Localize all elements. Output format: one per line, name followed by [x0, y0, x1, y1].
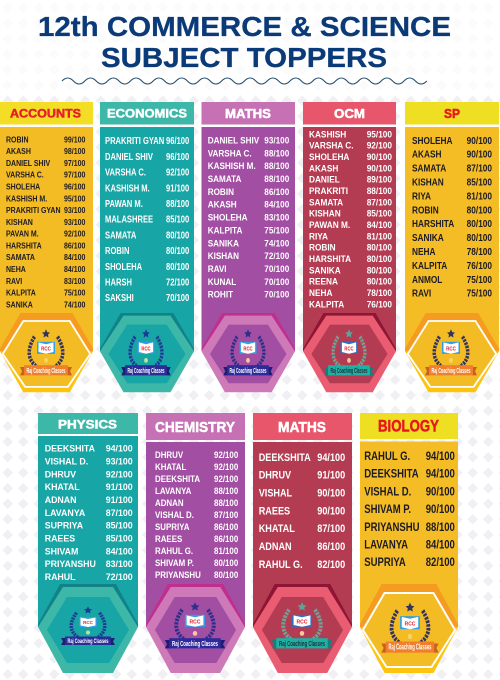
chemistry list: 80/100: [214, 570, 239, 580]
economics list: 80/100: [166, 229, 189, 241]
maths list: 70/100: [264, 276, 289, 287]
chemistry list: [155, 450, 239, 580]
physics list: 92/100: [106, 469, 133, 479]
panel: physics: [38, 413, 138, 673]
economics list: 80/100: [166, 261, 189, 272]
chemistry list: 86/100: [214, 522, 239, 532]
ocm list: SANIKA: [309, 265, 341, 275]
maths list: 94/100: [317, 452, 346, 464]
logo: Raj Coaching Classes: Raj Coaching Classes: [26, 367, 66, 375]
economics list: 72/100: [166, 276, 189, 288]
ocm list: REENA: [309, 276, 338, 287]
accounts list: NEHA: [6, 264, 26, 274]
economics list: SAKSHI: [105, 292, 134, 303]
logo: Raj Coaching Classes: [272, 602, 332, 648]
accounts list: 99/100: [64, 135, 86, 144]
accounts header: ACCOUNTS: [10, 106, 81, 120]
physics list: PRIYANSHU: [45, 559, 96, 569]
ocm list: PAWAN M.: [309, 220, 350, 230]
panel: accounts: [0, 102, 93, 392]
maths list: ADNAN: [259, 541, 292, 553]
ocm list: RIYA: [309, 231, 328, 241]
biology list: DEEKSHITA: [364, 468, 419, 481]
sp list: 90/100: [467, 149, 492, 160]
sp list: SANIKA: [412, 232, 444, 243]
maths list: AKASH: [208, 199, 237, 210]
maths list: 83/100: [264, 212, 289, 223]
physics list: SHIVAM: [45, 546, 79, 556]
ocm list: SAMATA: [309, 197, 343, 207]
panel: maths (science): [253, 413, 352, 673]
logo: Raj Coaching Classes: Raj Coaching Classes: [389, 642, 431, 652]
maths list: 86/100: [264, 186, 289, 197]
maths header: MATHS: [278, 420, 326, 436]
physics badge: [38, 584, 138, 673]
chemistry list: 92/100: [214, 450, 239, 460]
biology list: 84/100: [426, 539, 455, 552]
ocm list: KISHAN: [309, 208, 341, 219]
title: SUBJECT TOPPERS: [101, 42, 387, 73]
accounts list: 93/100: [64, 205, 86, 215]
chemistry list: 80/100: [214, 558, 239, 568]
panel: economics: [100, 102, 194, 392]
maths list: 87/100: [317, 523, 346, 535]
chemistry list: VISHAL D.: [155, 510, 194, 520]
economics list: 96/100: [166, 135, 189, 146]
physics list: 84/100: [106, 546, 133, 556]
sp header: SP: [444, 107, 460, 121]
economics list: 70/100: [166, 292, 189, 303]
sp list: 87/100: [467, 163, 492, 174]
maths list: DHRUV: [259, 470, 291, 482]
accounts list: KASHISH M.: [6, 194, 47, 203]
ocm list: 89/100: [367, 174, 392, 185]
ocm list: DANIEL: [309, 174, 340, 185]
maths list: KISHAN: [208, 251, 239, 261]
accounts list: 93/100: [64, 217, 86, 227]
ocm list: 78/100: [367, 288, 392, 298]
accounts list: HARSHITA: [6, 241, 42, 251]
logo: Raj Coaching Classes: [223, 329, 273, 375]
chemistry list: DHRUV: [155, 450, 184, 460]
maths list: 93/100: [264, 135, 289, 146]
ocm list: 84/100: [367, 220, 392, 230]
physics list: LAVANYA: [45, 508, 86, 518]
logo: Raj Coaching Classes: RCC: [344, 346, 354, 353]
panel: ocm: [303, 102, 396, 392]
maths list: ROBIN: [208, 186, 234, 197]
sp list: 90/100: [467, 135, 492, 146]
panel: biology: [360, 413, 458, 673]
panel: maths (commerce): [202, 102, 295, 392]
sp list: NEHA: [412, 246, 436, 257]
economics list: 85/100: [166, 214, 189, 225]
maths list: VISHAL: [259, 488, 292, 500]
ocm list: HARSHITA: [309, 254, 351, 264]
biology list: 94/100: [426, 450, 455, 463]
biology list: 88/100: [426, 521, 455, 534]
chemistry list: 86/100: [214, 534, 239, 544]
biology list: SHIVAM P.: [364, 503, 411, 516]
maths badge: [202, 313, 295, 392]
sp list: 75/100: [467, 274, 492, 285]
sp list: AKASH: [412, 149, 441, 160]
sp list: HARSHITA: [412, 218, 455, 229]
logo: Raj Coaching Classes: RCC: [243, 346, 253, 353]
accounts list: VARSHA C.: [6, 170, 44, 180]
maths list: 70/100: [264, 263, 289, 274]
chemistry list: 88/100: [214, 486, 239, 496]
chemistry list: 88/100: [214, 498, 239, 508]
ocm list: 90/100: [367, 152, 392, 162]
sp list: 75/100: [467, 288, 492, 299]
logo: Raj Coaching Classes: RCC: [141, 346, 151, 353]
accounts list: [6, 135, 86, 310]
physics list: [45, 443, 133, 582]
logo: Raj Coaching Classes: RCC: [41, 346, 51, 353]
accounts list: DANIEL SHIV: [6, 158, 51, 168]
accounts list: 83/100: [64, 276, 86, 286]
ocm list: NEHA: [309, 288, 332, 298]
economics list: SHOLEHA: [105, 261, 143, 272]
maths list: DANIEL SHIV: [208, 135, 259, 146]
biology list: SUPRIYA: [364, 556, 406, 569]
maths list: ROHIT: [208, 289, 234, 300]
maths list: 90/100: [317, 488, 346, 500]
maths list: 75/100: [264, 225, 289, 236]
physics list: 83/100: [106, 559, 133, 569]
logo: Raj Coaching Classes: RCC: [446, 346, 456, 353]
maths list: 91/100: [317, 470, 346, 482]
sp list: 78/100: [467, 246, 492, 257]
biology list: 90/100: [426, 503, 455, 516]
physics header: PHYSICS: [58, 420, 117, 432]
accounts list: 84/100: [64, 264, 86, 274]
logo: Raj Coaching Classes: [165, 602, 225, 648]
maths list: RAVI: [208, 263, 227, 274]
accounts header: [0, 102, 93, 124]
sp list: 81/100: [467, 191, 492, 202]
maths list: SANIKA: [208, 238, 240, 248]
maths list: 72/100: [264, 251, 289, 261]
biology list: 90/100: [426, 486, 455, 499]
sp list: 80/100: [467, 205, 492, 215]
logo: Raj Coaching Classes: [381, 603, 439, 653]
ocm badge: [303, 313, 396, 392]
chemistry list: PRIYANSHU: [155, 570, 201, 580]
ocm list: PRAKRITI: [309, 186, 348, 196]
maths list: 88/100: [264, 148, 289, 158]
physics list: 72/100: [106, 572, 133, 582]
ocm list: 95/100: [367, 129, 392, 139]
maths list: KASHISH M.: [208, 161, 256, 171]
maths list: 70/100: [264, 289, 289, 300]
sp list: 80/100: [467, 218, 492, 229]
sp list: ROBIN: [412, 205, 439, 215]
biology list: LAVANYA: [364, 539, 408, 552]
chemistry list: RAEES: [155, 534, 183, 544]
accounts list: 92/100: [64, 229, 86, 239]
accounts list: SANIKA: [6, 300, 33, 310]
chemistry list: SHIVAM P.: [155, 558, 194, 568]
panel: chemistry: [146, 413, 245, 673]
physics list: 85/100: [106, 520, 133, 531]
ocm list: 87/100: [367, 197, 392, 207]
chemistry list: 92/100: [214, 462, 239, 472]
chemistry list: 92/100: [214, 474, 239, 484]
accounts list: 84/100: [64, 253, 86, 262]
economics list: DANIEL SHIV: [105, 151, 153, 162]
maths list: KALPITA: [208, 225, 243, 236]
accounts list: 96/100: [64, 182, 86, 192]
economics list: 88/100: [166, 198, 189, 209]
sp list: RAVI: [412, 288, 431, 299]
logo: Raj Coaching Classes: Raj Coaching Classes: [68, 639, 109, 645]
sp header: [405, 102, 499, 124]
maths list: [208, 135, 289, 300]
physics list: 93/100: [106, 456, 133, 466]
logo: Raj Coaching Classes: Raj Coaching Classes: [229, 367, 267, 375]
economics list: PAWAN M.: [105, 198, 143, 209]
ocm header: OCM: [334, 107, 365, 121]
sp list: KALPITA: [412, 260, 448, 271]
accounts list: ROBIN: [6, 135, 29, 144]
sp list: 80/100: [467, 232, 492, 243]
sp list: 76/100: [467, 260, 492, 271]
logo: Raj Coaching Classes: RCC: [190, 619, 201, 626]
economics list: VARSHA C.: [105, 167, 146, 178]
maths list: KHATAL: [259, 523, 295, 535]
physics list: DHRUV: [45, 469, 77, 479]
ocm list: KASHISH: [309, 129, 346, 139]
physics list: RAEES: [45, 533, 75, 544]
maths list: 88/100: [264, 173, 289, 184]
accounts list: AKASH: [6, 146, 31, 156]
ocm header: [303, 102, 396, 124]
sp list: ANMOL: [412, 274, 443, 285]
maths list: SAMATA: [208, 173, 242, 184]
chemistry header: CHEMISTRY: [155, 419, 235, 436]
physics list: DEEKSHITA: [45, 443, 95, 454]
chemistry list: DEEKSHITA: [155, 474, 200, 484]
ocm list: 80/100: [367, 265, 392, 275]
accounts list: SAMATA: [6, 253, 35, 262]
accounts list: KALPITA: [6, 288, 36, 298]
logo: Raj Coaching Classes: [121, 329, 171, 375]
biology list: 94/100: [426, 468, 455, 481]
ocm list: 80/100: [367, 242, 392, 253]
ocm list: 90/100: [367, 163, 392, 173]
biology list: 82/100: [426, 556, 455, 569]
logo: Raj Coaching Classes: RCC: [297, 619, 308, 626]
chemistry list: RAHUL G.: [155, 546, 193, 556]
biology header: [360, 413, 458, 439]
ocm list: VARSHA C.: [309, 140, 354, 151]
logo: Raj Coaching Classes: [20, 329, 72, 375]
ocm list: ROBIN: [309, 242, 336, 253]
maths list: RAEES: [259, 506, 290, 518]
ocm list: 80/100: [367, 276, 392, 287]
chemistry list: ADNAN: [155, 498, 184, 508]
ocm list: 76/100: [367, 299, 392, 309]
maths header: [202, 102, 295, 124]
physics list: VISHAL D.: [45, 456, 88, 466]
maths list: 90/100: [317, 506, 346, 518]
economics list: SAMATA: [105, 229, 137, 241]
ocm list: 88/100: [367, 186, 392, 196]
logo: Raj Coaching Classes: Raj Coaching Classes: [330, 367, 368, 375]
biology list: RAHUL G.: [364, 450, 410, 463]
economics list: 80/100: [166, 245, 189, 256]
accounts list: 95/100: [64, 194, 86, 203]
logo: Raj Coaching Classes: [425, 329, 477, 375]
maths list: 84/100: [264, 199, 289, 210]
physics list: SUPRIYA: [45, 520, 83, 531]
maths list: [259, 452, 346, 571]
maths badge: [253, 584, 352, 673]
maths list: SHOLEHA: [208, 212, 248, 223]
sp list: SHOLEHA: [412, 135, 453, 146]
chemistry list: 87/100: [214, 510, 239, 520]
ocm list: 81/100: [367, 231, 392, 241]
economics header: [100, 102, 194, 124]
title: 12th COMMERCE & SCIENCE: [38, 11, 451, 42]
maths list: RAHUL G.: [259, 559, 303, 571]
economics list: MALASHREE: [105, 214, 153, 225]
sp list: SAMATA: [412, 163, 447, 174]
economics list: ROBIN: [105, 245, 129, 256]
title: [38, 11, 451, 73]
economics list: HARSH: [105, 276, 132, 288]
chemistry list: 81/100: [214, 546, 239, 556]
maths header: MATHS: [225, 107, 271, 121]
biology list: [364, 450, 455, 569]
accounts list: 97/100: [64, 158, 86, 168]
maths list: 82/100: [317, 559, 346, 571]
biology list: VISHAL D.: [364, 486, 411, 499]
accounts list: RAVI: [6, 276, 22, 286]
maths list: VARSHA C.: [208, 148, 252, 158]
logo: Raj Coaching Classes: RCC: [83, 620, 94, 625]
chemistry list: LAVANYA: [155, 486, 191, 496]
economics badge: [100, 313, 194, 392]
chemistry badge: [146, 584, 245, 673]
maths list: 86/100: [317, 541, 346, 553]
accounts list: 74/100: [64, 300, 86, 310]
accounts badge: [0, 313, 93, 392]
sp list: [412, 135, 492, 299]
accounts list: 97/100: [64, 170, 86, 180]
physics header: [38, 413, 138, 434]
ocm list: SHOLEHA: [309, 152, 349, 162]
economics list: 96/100: [166, 151, 189, 162]
economics list: KASHISH M.: [105, 182, 150, 194]
sp badge: [405, 313, 499, 392]
economics list: [105, 135, 189, 303]
maths list: 88/100: [264, 161, 289, 171]
economics list: 91/100: [166, 182, 189, 194]
chemistry list: KHATAL: [155, 462, 186, 472]
maths list: DEEKSHITA: [259, 452, 311, 464]
ocm list: [309, 129, 392, 309]
accounts list: PRAKRITI GYAN: [6, 205, 61, 215]
maths list: KUNAL: [208, 276, 237, 287]
logo: Raj Coaching Classes: Raj Coaching Classes: [432, 367, 471, 375]
chemistry header: [146, 413, 245, 440]
physics list: 94/100: [106, 443, 133, 454]
chemistry list: SUPRIYA: [155, 522, 189, 532]
physics list: 85/100: [106, 533, 133, 544]
economics header: ECONOMICS: [107, 106, 187, 120]
economics list: PRAKRITI GYAN: [105, 135, 164, 146]
logo: Raj Coaching Classes: Raj Coaching Classes: [127, 367, 165, 375]
physics list: 87/100: [106, 508, 133, 518]
maths header: [253, 413, 352, 440]
logo: Raj Coaching Classes: Raj Coaching Classes: [279, 641, 325, 648]
panel: sp: [405, 102, 499, 392]
physics list: KHATAL: [45, 482, 80, 492]
physics list: ADNAN: [45, 495, 77, 505]
physics list: 91/100: [106, 482, 133, 492]
economics list: 92/100: [166, 167, 189, 178]
physics list: RAHUL: [45, 572, 76, 582]
accounts list: PAVAN M.: [6, 229, 39, 239]
accounts list: 98/100: [64, 146, 86, 156]
maths list: 74/100: [264, 238, 289, 248]
biology header: BIOLOGY: [378, 418, 439, 436]
ocm list: 85/100: [367, 208, 392, 219]
biology list: PRIYANSHU: [364, 521, 420, 534]
accounts list: KISHAN: [6, 217, 33, 227]
wavy title underline: [62, 78, 427, 84]
accounts list: SHOLEHA: [6, 182, 41, 192]
ocm list: AKASH: [309, 163, 338, 173]
sp list: RIYA: [412, 191, 431, 202]
accounts list: 75/100: [64, 288, 86, 298]
biology badge: [360, 584, 458, 673]
ocm list: 92/100: [367, 140, 392, 151]
ocm list: 80/100: [367, 254, 392, 264]
sp list: KISHAN: [412, 177, 444, 188]
sp list: 85/100: [467, 177, 492, 188]
physics list: 91/100: [106, 495, 133, 505]
logo: Raj Coaching Classes: RCC: [405, 621, 415, 628]
logo: Raj Coaching Classes: [324, 329, 374, 375]
logo: Raj Coaching Classes: Raj Coaching Classes: [172, 641, 218, 648]
accounts list: 86/100: [64, 241, 86, 251]
ocm list: KALPITA: [309, 299, 344, 309]
logo: Raj Coaching Classes: [61, 606, 115, 645]
